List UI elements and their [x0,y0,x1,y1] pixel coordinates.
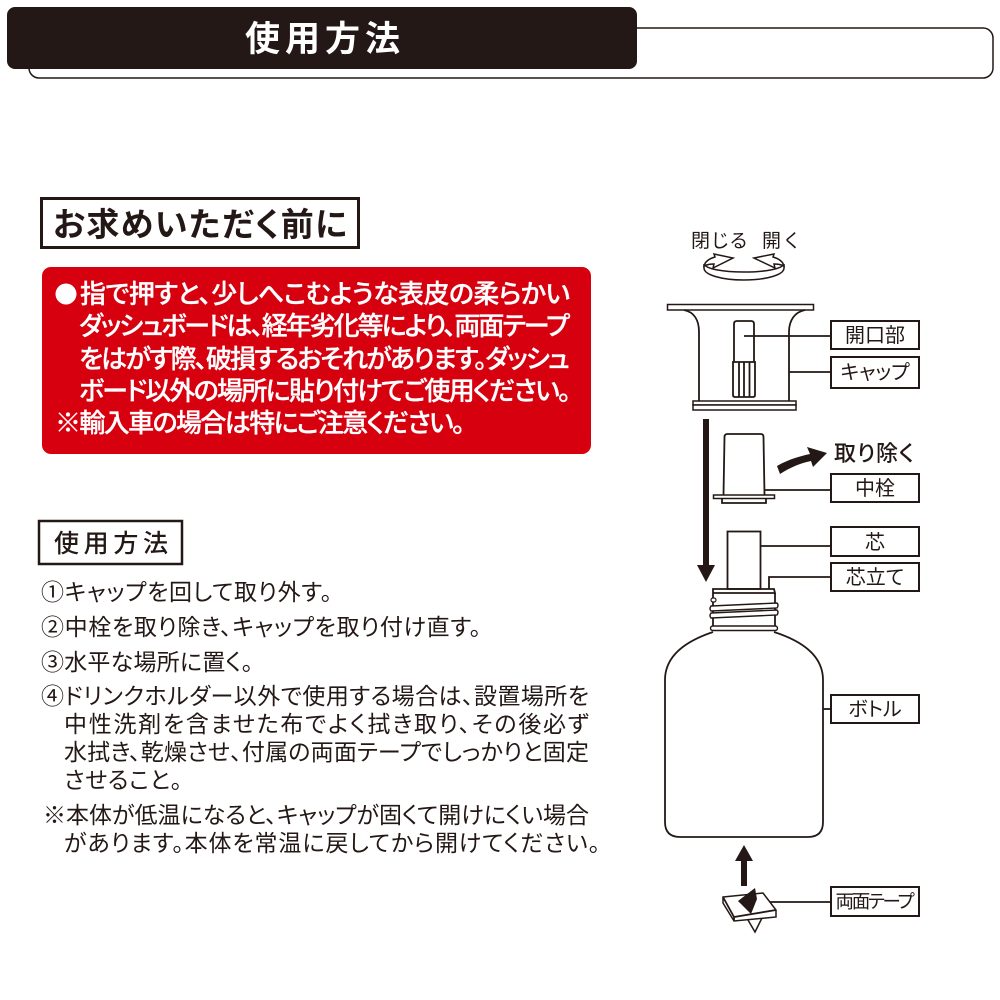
leader and label: cap [789,357,919,388]
text block: note [43,802,600,856]
leader and label: opening: 開口部 [845,324,905,347]
panel: red warning: ダッシュボードは、経年劣化等により、両面テープ [79,311,571,341]
text block: usage steps: ②中栓を取り除き、キャップを取り付け直す。 [41,614,481,640]
leader and label: core stand [769,563,919,591]
cap illustration [668,304,814,410]
heading: usage [39,521,182,564]
leader and label: inner plug: 中栓 [855,477,895,500]
panel: red warning: ※輸入車の場合は特にご注意ください。 [55,408,465,438]
panel: red warning: 指で押すと、少しへこむような表皮の柔らかい [80,279,570,309]
leader and label: inner plug [764,474,919,502]
header banner [7,7,993,78]
bottle illustration [665,589,823,837]
label: close and open [691,231,798,252]
leader and label: tape: 両面テープ [836,891,915,912]
text block: note: があります。本体を常温に戻してから開けてください。 [64,830,600,856]
heading: before purchase: お求めいただく前に [53,206,347,243]
label: close and open: 閉じる [691,231,747,252]
text block: usage steps: させること。 [64,767,182,793]
text block: usage steps: ①キャップを回して取り外す。 [41,579,332,605]
leader and label: core: 芯 [865,531,885,554]
text block: usage steps: 水拭き、乾燥させ、付属の両面テープでしっかりと固定 [64,739,589,765]
panel: red warning: ボード以外の場所に貼り付けてご使用ください。 [79,376,571,406]
panel: red warning: をはがす際、破損するおそれがあります。ダッシュ [79,344,570,374]
text block: usage steps: ④ドリンクホルダー以外で使用する場合は、設置場所を [41,683,589,709]
text block: note: ※本体が低温になると、キャップが固くて開けにくい場合 [43,802,589,828]
arrow: up [735,845,753,886]
arrow: remove [777,447,827,474]
inner plug illustration [714,434,774,503]
core illustration [728,532,760,589]
leader and label: core stand: 芯立て [846,566,904,589]
leader and label: core [760,527,919,556]
leader and label: opening [744,321,919,349]
text block: usage steps [41,579,589,793]
leader and label: tape [770,887,919,916]
icon: rotation arrows [704,254,784,280]
text block: usage steps: 中性洗剤を含ませた布でよく拭き取り、その後必ず [64,711,589,737]
leader and label: bottle: ボトル [848,698,902,721]
arrow: down [697,419,715,582]
panel: red warning [42,267,591,454]
label: close and open: 開く [762,231,798,252]
text block: usage steps: ③水平な場所に置く。 [41,649,253,675]
heading: usage: 使用方法 [54,530,168,558]
icon: double-sided tape [723,888,776,932]
leader and label: bottle [823,695,919,723]
label: remove: 取り除く [834,441,914,466]
leader and label: cap: キャップ [840,362,910,384]
header banner: 使用方法 [245,20,400,59]
